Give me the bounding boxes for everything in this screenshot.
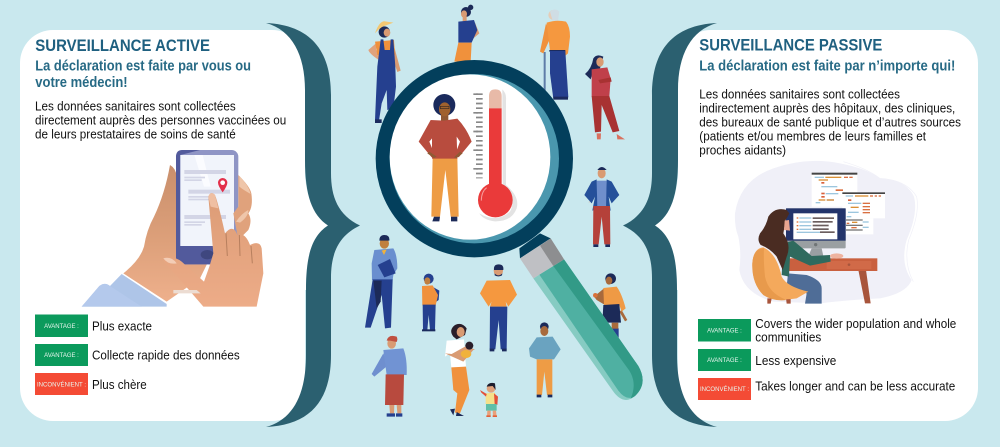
text block: active description: Les données sanitaires sont collectées [35,98,236,113]
code window [812,173,857,207]
row: inconvenient plus chere [35,373,147,395]
subheading: active [35,58,251,91]
row: inconvenient plus chere: Plus chère [92,377,147,392]
person in lens [419,94,472,221]
computer monitor [786,208,846,256]
row: avantage plus exacte: Plus exacte [92,318,152,333]
icon: hands holding phone [82,150,263,307]
thermometer [476,89,517,221]
row: avantage less expensive: Less expensive [755,353,836,368]
code window [846,218,873,234]
row: avantage less expensive [698,349,836,371]
row: avantage plus exacte [35,314,152,337]
row: avantage collecte rapide: AVANTAGE : [44,353,79,359]
handle [533,259,643,400]
person: woman with hat and overalls [368,21,401,123]
person: woman with red skirt [372,336,407,417]
panel: surveillance active [20,30,328,421]
desk [787,258,877,303]
person: man in blue jacket [584,167,619,247]
subheading: active: votre médecin! [35,74,128,91]
text block: passive description [699,86,961,157]
row: inconvenient takes longer: Takes longer and can be less accurate [755,379,955,394]
text block: active description [35,98,286,142]
person: old man with cane [540,9,570,100]
person: man with book [365,235,397,328]
left brace [266,23,360,427]
row: avantage covers: communities [755,330,822,344]
person: man in orange [480,264,517,351]
heading: surveillance active: SURVEILLANCE ACTIVE [35,37,210,55]
text block: passive description: proches aidants) [699,142,786,157]
text block: active description: directement auprès des personnes vaccinées ou [35,112,286,127]
panel: surveillance passive [655,30,978,421]
text block: passive description: des bureaux de santé publique et d’autres sources [699,114,961,129]
row: inconvenient takes longer: INCONVÉNIENT : [700,386,749,393]
row: inconvenient plus chere: INCONVÉNIENT : [37,381,86,388]
row: avantage less expensive: AVANTAGE : [707,358,742,364]
text block: passive description: indirectement auprès des hôpitaux, des cliniques, [699,100,955,115]
heading: surveillance passive: SURVEILLANCE PASSIVE [699,37,882,55]
text block: passive description: (patients et/ou membres de leurs familles et [699,128,926,143]
right brace [623,23,717,427]
person: toddler [480,383,498,417]
woman working [752,209,843,304]
person: mother with baby [445,324,475,416]
person: woman in red [585,55,625,139]
row: inconvenient takes longer [698,378,955,400]
subheading: active: La déclaration est faite par vous ou [35,58,251,75]
row: avantage covers [698,316,956,344]
person: woman with orange top and skirt [593,273,627,338]
row: avantage collecte rapide [35,344,240,366]
person: child with backpack [422,274,439,331]
row: avantage covers: Covers the wider population and whole [755,316,956,331]
subheading: passive: La déclaration est faite par n’importe qui! [699,58,955,75]
code window [842,192,885,218]
text block: active description: de leurs prestataires de soins de santé [35,126,236,142]
person: man in teal [529,322,561,397]
illustration: crowd and magnifying glass [365,5,643,417]
row: avantage plus exacte: AVANTAGE : [44,324,79,330]
magnifying glass [383,67,643,400]
row: avantage covers: AVANTAGE : [707,328,742,334]
person: woman in blue top [454,5,479,62]
icon: woman at computer [735,161,917,304]
text block: passive description: Les données sanitaires sont collectées [699,86,900,101]
metal collar [520,238,564,278]
row: avantage collecte rapide: Collecte rapide des données [92,347,240,362]
